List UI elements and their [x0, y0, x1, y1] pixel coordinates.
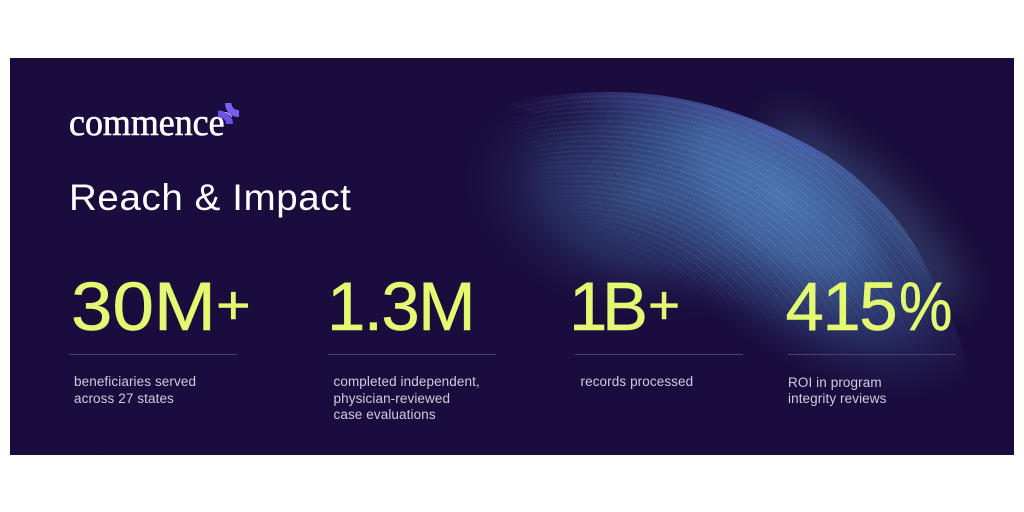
stat 1 divider	[69, 354, 236, 355]
stat 4 label: ROI in program	[788, 374, 882, 390]
stat 3 value: 1B+	[569, 268, 680, 345]
heading: Reach & Impact	[69, 177, 352, 218]
stat 1 value: 30M+	[71, 268, 251, 345]
logo wordmark: commence	[69, 102, 225, 144]
stat 4 divider	[788, 354, 956, 355]
stat 2 label: physician-reviewed	[334, 390, 450, 406]
stat 4 label: integrity reviews	[788, 391, 886, 406]
stat 2 label: case evaluations	[334, 407, 436, 422]
graphic: dotted globe	[498, 92, 974, 379]
stat 2 label: completed independent,	[334, 374, 480, 389]
stat 1 label	[74, 374, 196, 406]
stat 3 label: records processed	[580, 374, 693, 389]
stat 4 label	[788, 374, 886, 406]
stat 2 label	[334, 374, 480, 422]
icon: logo mark	[218, 103, 239, 124]
stat 1 label: across 27 states	[74, 390, 174, 406]
stat 1 label: beneficiaries served	[74, 374, 196, 389]
stat 4 value: %	[899, 268, 951, 345]
stat 2 divider	[328, 354, 496, 355]
stat 4 value	[786, 268, 951, 345]
stat 4 value: 415	[786, 268, 896, 345]
stat 3 divider	[575, 354, 742, 355]
panel: dark background	[10, 58, 1014, 455]
logo: commence	[69, 102, 239, 144]
stat 2 value: 1.3M	[327, 268, 474, 345]
